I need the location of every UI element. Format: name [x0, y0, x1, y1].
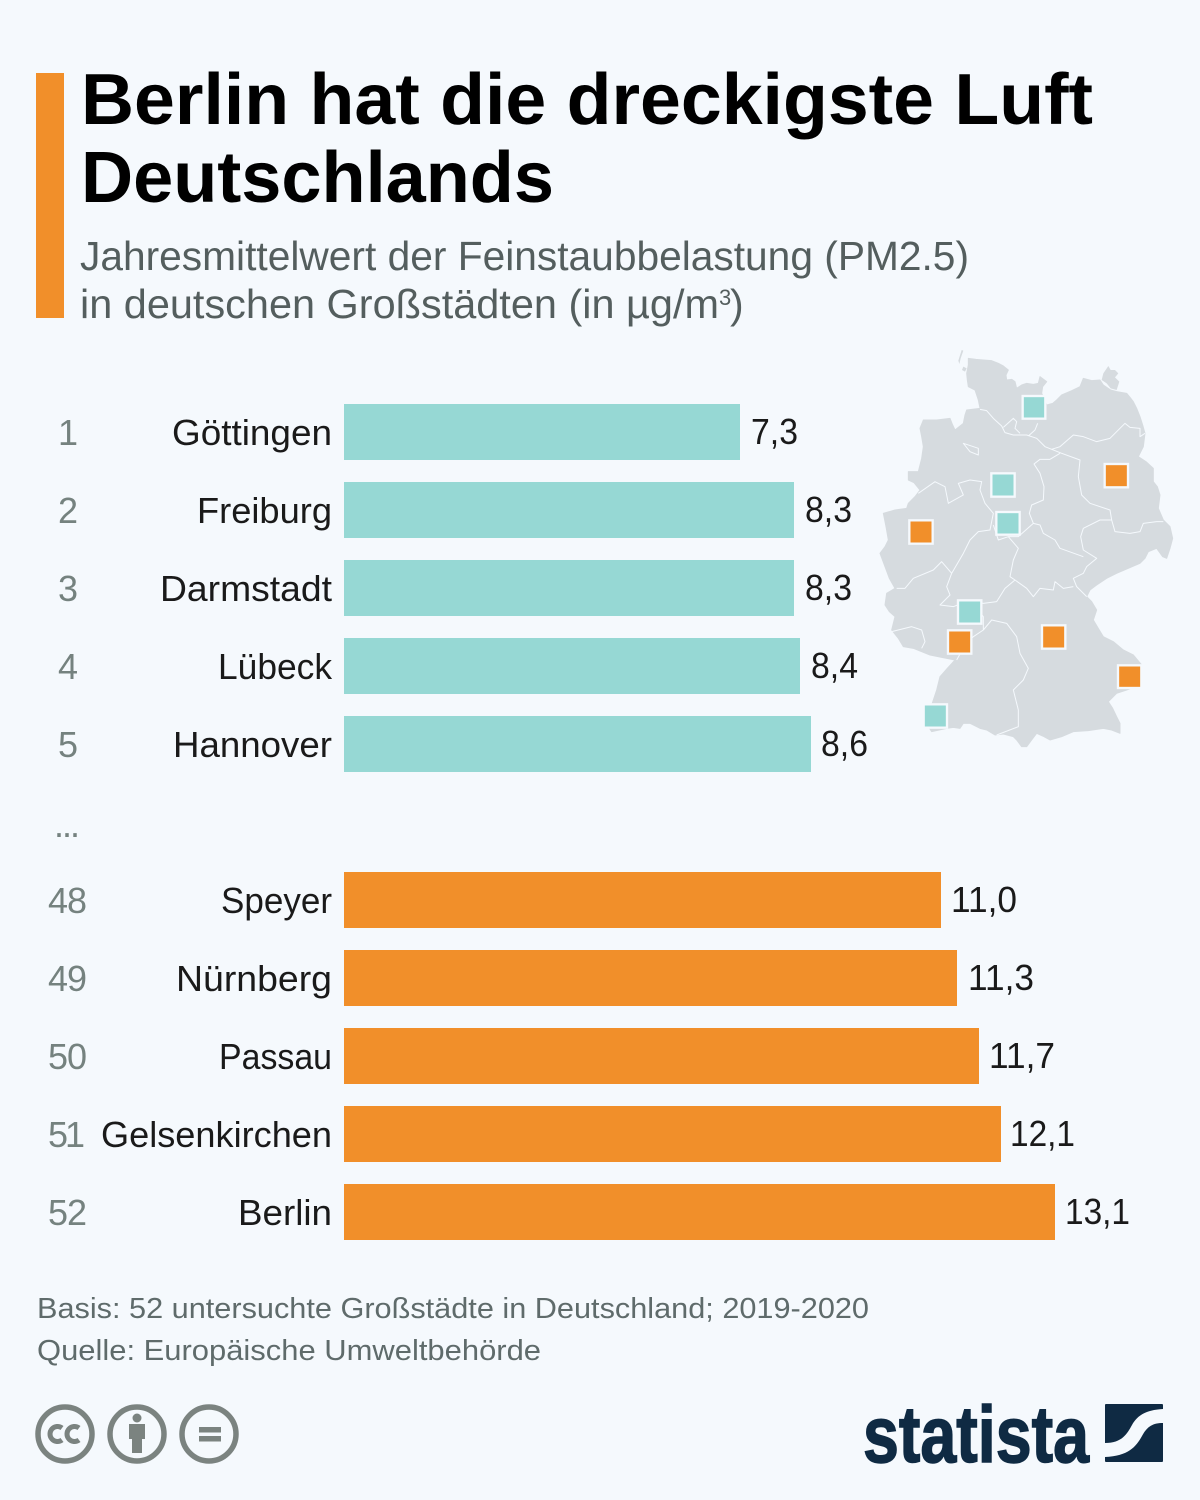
bar row: Passau: Passau [219, 1036, 332, 1077]
bar row: Speyer: 48 [48, 880, 87, 921]
subtitle [80, 233, 969, 327]
statista logo: statista [863, 1390, 1089, 1479]
footer: basis and source: Quelle: Europäische Umweltbehörde [37, 1335, 541, 1367]
bar row: Freiburg: 2 [58, 490, 78, 531]
bar row: Lübeck: 4 [58, 646, 78, 687]
subtitle: ) [730, 281, 744, 327]
bar row: Göttingen: 7,3 [751, 411, 798, 452]
ellipsis: ... [54, 804, 80, 845]
bar row: Berlin: Berlin [238, 1192, 332, 1233]
icon: no derivatives [182, 1407, 236, 1461]
subtitle: 3 [719, 285, 731, 310]
bar row: Passau [48, 1028, 1055, 1084]
bar row: Darmstadt: 8,3 [805, 567, 852, 608]
bar row: Berlin: 52 [48, 1192, 87, 1233]
bar row: Berlin [48, 1184, 1130, 1240]
bar row: Göttingen: 1 [58, 412, 78, 453]
bar row: Göttingen [58, 404, 798, 460]
bar row: Berlin: 13,1 [1065, 1191, 1130, 1232]
bar row: Nürnberg [48, 950, 1034, 1006]
bar row: Darmstadt: 3 [58, 568, 78, 609]
bar row: Freiburg: Freiburg [197, 490, 332, 531]
bar row: Darmstadt [58, 560, 852, 616]
bar row: Gelsenkirchen: 51 [48, 1114, 85, 1155]
map: city markers [909, 396, 1141, 728]
map: country outline [880, 358, 1173, 747]
logo mark [1105, 1404, 1163, 1462]
subtitle: Jahresmittelwert der Feinstaubbelastung (PM2.5) [80, 233, 969, 279]
bar row: Hannover: 5 [58, 724, 78, 765]
bar row: Hannover: 8,6 [821, 723, 868, 764]
map: islands [958, 350, 1135, 405]
title: Berlin hat die dreckigste Luft [81, 60, 1093, 140]
icon: attribution [110, 1407, 164, 1461]
icon: CC license [38, 1407, 92, 1461]
footer: basis and source: Basis: 52 untersuchte Großstädte in Deutschland; 2019-2020 [37, 1293, 869, 1325]
bar row: Passau: 50 [48, 1036, 87, 1077]
bar row: Speyer: Speyer [221, 880, 332, 921]
bar row: Darmstadt: Darmstadt [160, 568, 332, 609]
map of Germany [880, 350, 1173, 747]
bar row: Gelsenkirchen: 12,1 [1010, 1113, 1075, 1154]
bar row: Hannover [58, 716, 868, 772]
bar row: Passau: 11,7 [989, 1035, 1055, 1076]
subtitle: in deutschen Großstädten (in µg/m [80, 281, 719, 327]
accent bar [36, 73, 64, 318]
bar row: Lübeck: Lübeck [218, 646, 333, 687]
bar row: Gelsenkirchen: Gelsenkirchen [101, 1114, 332, 1155]
bar row: Lübeck [58, 638, 858, 694]
bar row: Göttingen: Göttingen [172, 412, 332, 453]
map: state borders [892, 409, 1163, 735]
bar row: Freiburg: 8,3 [805, 489, 852, 530]
bar row: Nürnberg: 11,3 [968, 957, 1034, 998]
title: Deutschlands [81, 138, 554, 218]
footer: basis and source [37, 1293, 869, 1367]
title [81, 60, 1093, 218]
bar row: Hannover: Hannover [173, 724, 332, 765]
bar row: Gelsenkirchen [48, 1106, 1075, 1162]
bar row: Speyer [48, 872, 1017, 928]
bar row: Speyer: 11,0 [951, 879, 1017, 920]
bar row: Lübeck: 8,4 [811, 645, 858, 686]
bar row: Nürnberg: Nürnberg [176, 958, 332, 999]
bar row: Nürnberg: 49 [48, 958, 87, 999]
bar row: Freiburg [58, 482, 852, 538]
